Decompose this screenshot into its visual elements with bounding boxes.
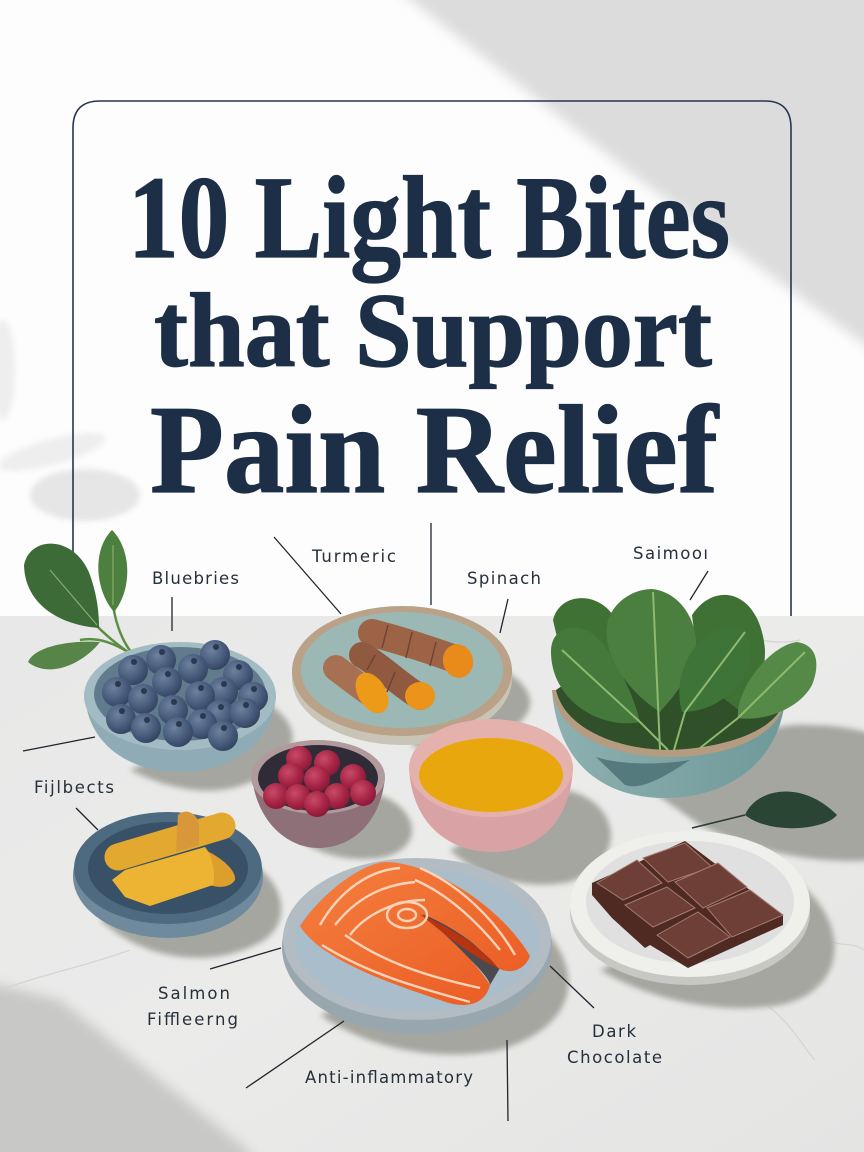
labels: Spinach: [467, 569, 541, 588]
bowl: blueberries: [84, 640, 276, 772]
labels: Turmeric: [311, 547, 396, 566]
bowl: golden broth: [409, 719, 573, 852]
title: that Support: [154, 272, 712, 389]
bowl: spinach: [551, 589, 816, 798]
labels: [34, 544, 708, 1087]
plant sprig top left: [24, 530, 131, 669]
labels: Dark: [592, 1022, 636, 1041]
plate: dark chocolate: [570, 831, 810, 985]
title: 10 Light Bites: [128, 152, 730, 283]
plate: salmon: [282, 858, 552, 1034]
bowl: raspberries: [251, 740, 385, 848]
labels: Salmon: [158, 984, 230, 1003]
plate: golden rolls: [73, 812, 263, 938]
title: [128, 152, 730, 520]
marble table: [0, 616, 864, 1152]
title frame: [73, 101, 791, 616]
title: Pain Relief: [150, 381, 720, 520]
labels: Fiffleerng: [147, 1010, 238, 1029]
leader lines: [23, 523, 708, 1121]
plate: turmeric: [292, 606, 512, 745]
labels: Fijlbects: [34, 778, 114, 797]
labels: Anti-inflammatory: [305, 1068, 473, 1087]
labels: Chocolate: [567, 1048, 662, 1067]
labels: Bluebries: [152, 569, 239, 588]
labels: Saimooı: [633, 544, 708, 563]
shadows on table: [100, 670, 864, 1055]
background wall: [0, 0, 864, 617]
small leaf on table: [692, 792, 837, 828]
